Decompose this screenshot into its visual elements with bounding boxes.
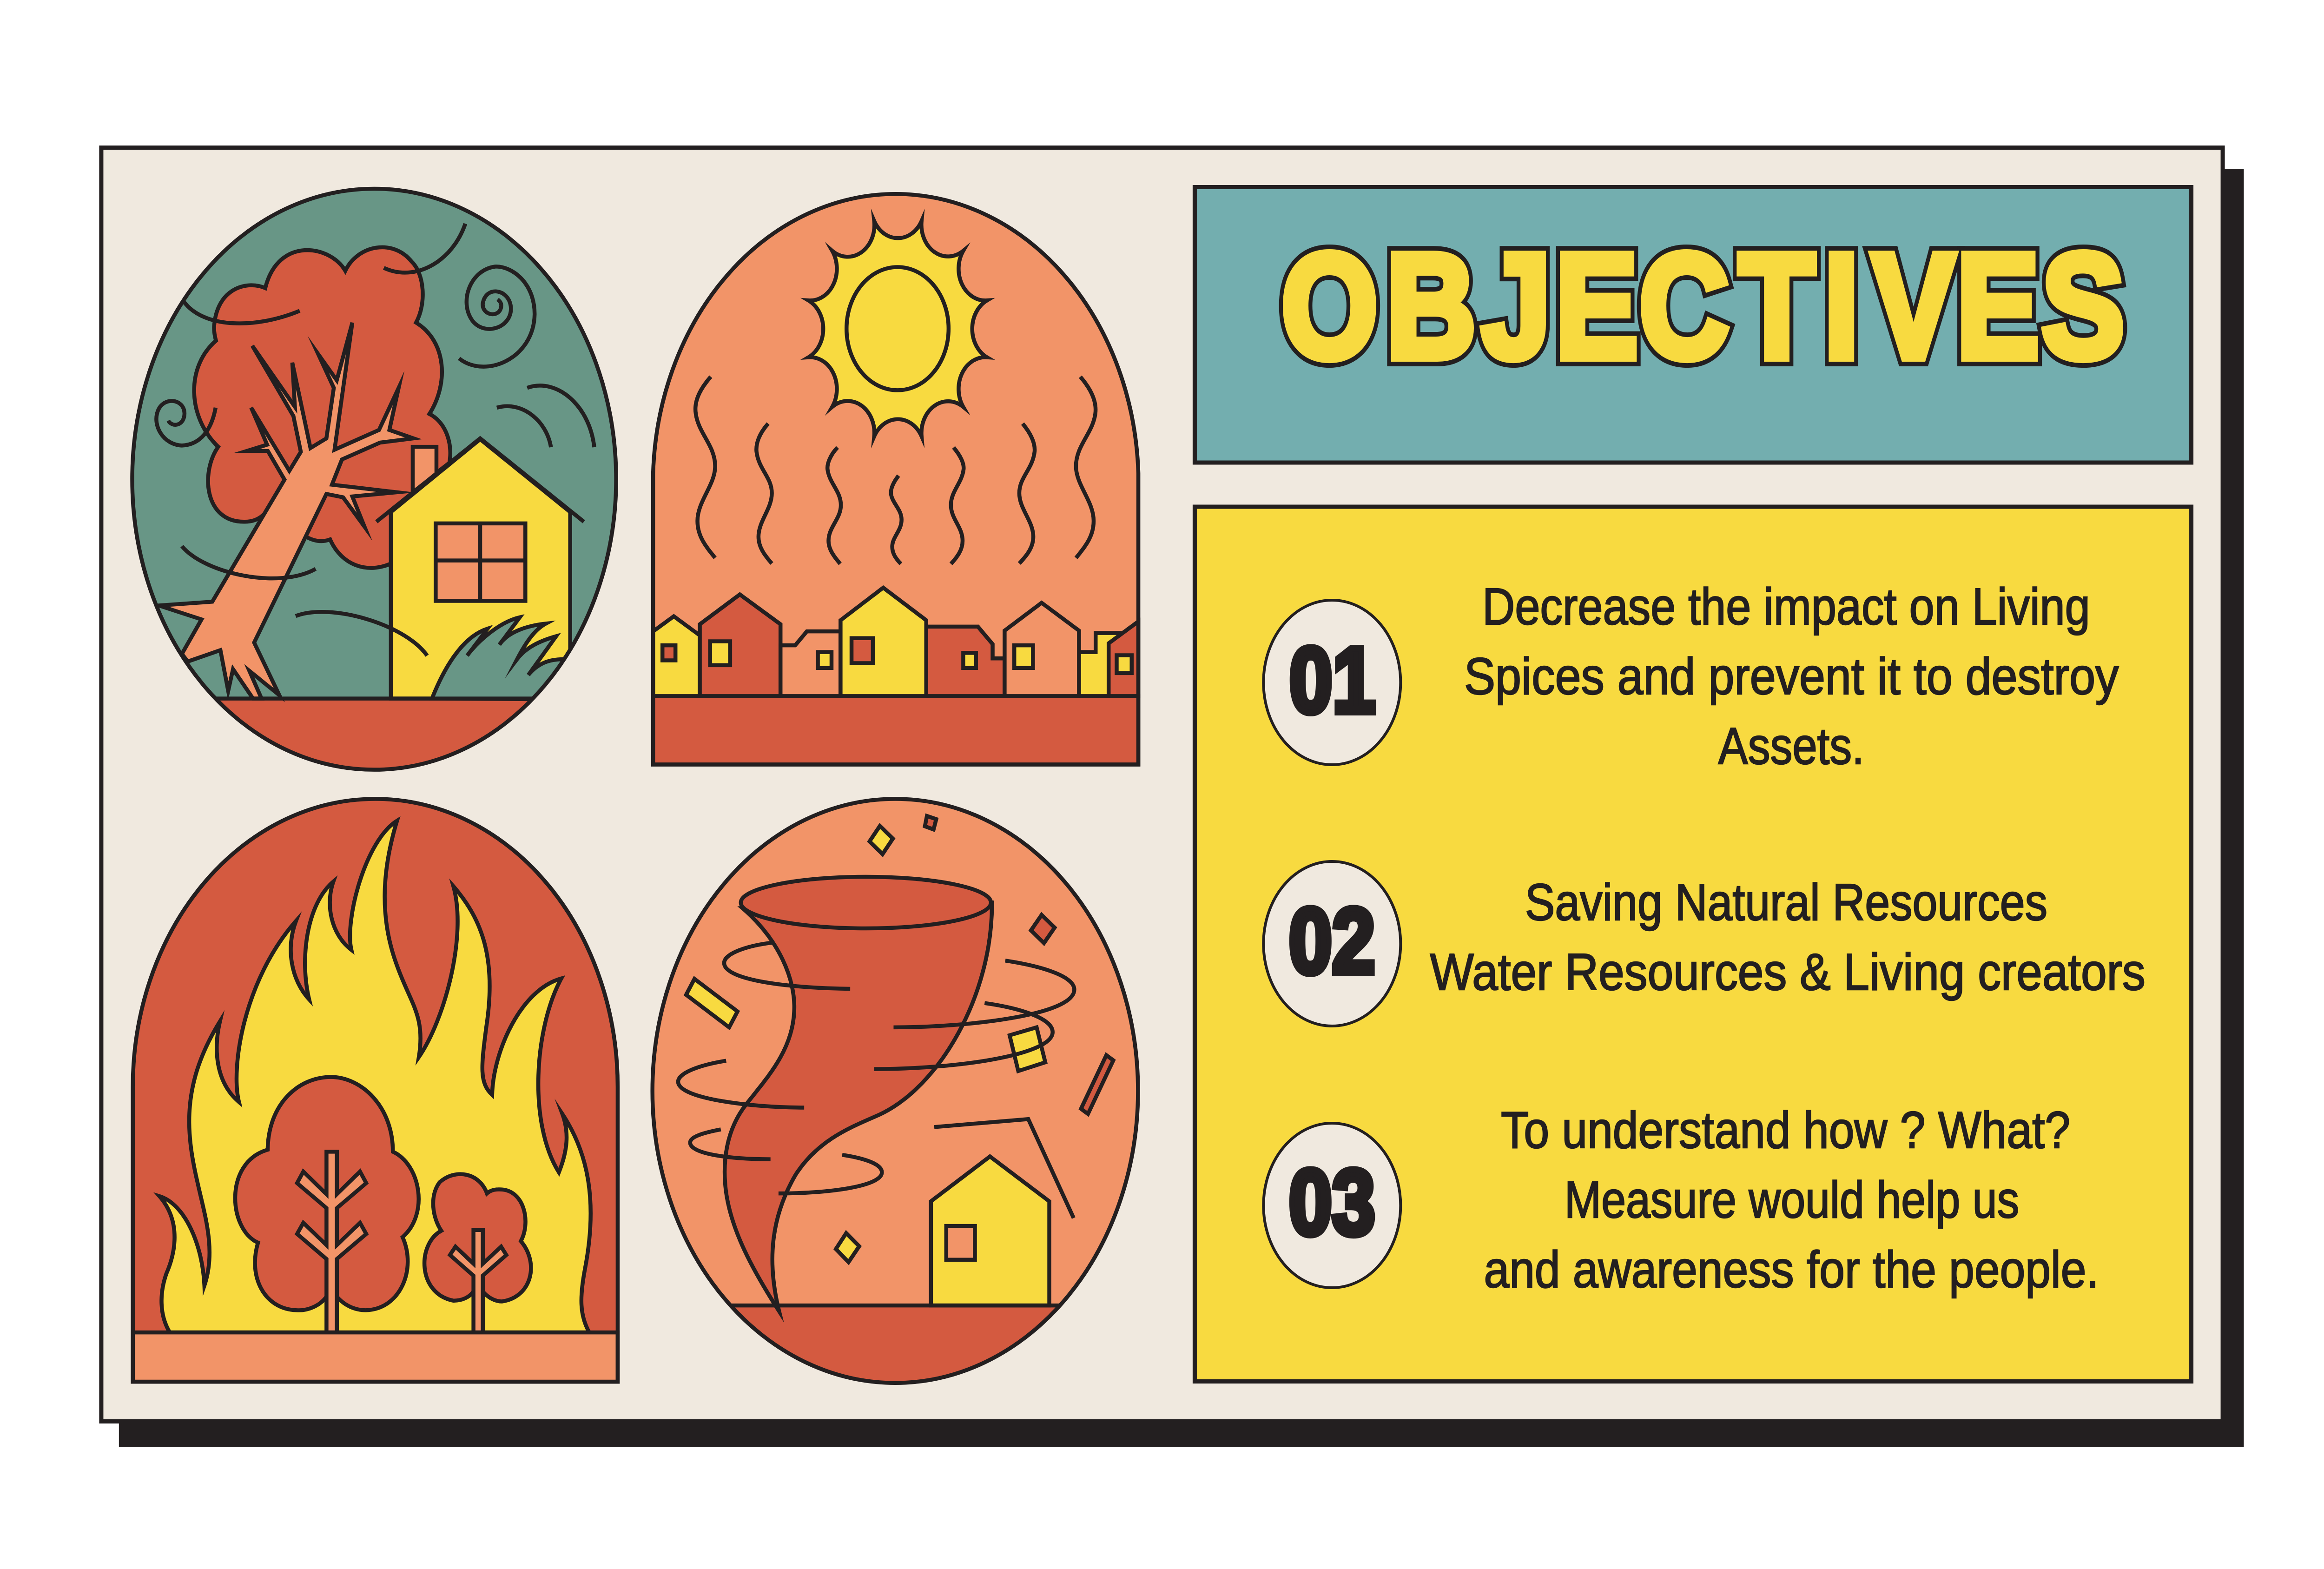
sun rays [808, 221, 987, 437]
objective 02 text: Saving Natural Resources [1525, 874, 2047, 931]
large tree trunk [297, 1152, 366, 1332]
ground [133, 1332, 618, 1382]
heatwave arch outline [653, 194, 1138, 764]
number badge 03: 03 [1289, 1151, 1375, 1254]
objective 02 text [1430, 874, 2146, 1001]
card drop shadow [119, 169, 2244, 1447]
tornado circle outline [653, 799, 1138, 1383]
number badge 01 [1263, 600, 1400, 765]
objective 02 text: Water Resources & Living creators [1430, 943, 2146, 1001]
panel: wildfire illustration [133, 799, 618, 1382]
small tree trunk [450, 1230, 506, 1332]
ground line [726, 1304, 1066, 1307]
roof line [376, 438, 584, 522]
panel: tornado illustration [649, 799, 1142, 1385]
tornado top [741, 877, 991, 928]
number badge 02 [1263, 861, 1400, 1026]
tornado body [725, 903, 992, 1311]
small tree crown [424, 1174, 531, 1302]
number badge 01: 01 [1289, 629, 1375, 732]
objective 03 [1263, 1101, 2099, 1298]
ground [649, 1305, 1142, 1385]
house [391, 439, 570, 699]
title: OBJECTIVES [1282, 224, 2124, 389]
ground [653, 696, 1138, 764]
objective 03 text [1484, 1101, 2099, 1298]
objective 01 text: Spices and prevent it to destroy [1464, 648, 2119, 705]
ground line [204, 696, 545, 701]
swirl lines [678, 943, 1074, 1193]
house window [436, 523, 525, 601]
panel: title banner [1195, 187, 2192, 463]
sun disc [846, 267, 949, 390]
objective 03 text: Measure would help us [1565, 1171, 2019, 1229]
house [931, 1157, 1050, 1305]
ground [220, 700, 528, 768]
panel: heatwave illustration [653, 194, 1138, 764]
heat waves [695, 377, 1096, 564]
tree crown [194, 247, 450, 568]
objective 03 text: and awareness for the people. [1484, 1241, 2099, 1298]
main card panel [101, 148, 2223, 1422]
grass [432, 617, 571, 699]
objective 02 [1263, 861, 2146, 1026]
panel: windstorm illustration [130, 189, 619, 775]
number badge 02: 02 [1289, 889, 1375, 993]
wildfire arch outline [133, 799, 618, 1382]
objective 03 text: To understand how ? What? [1501, 1101, 2070, 1159]
objective 01 text: Decrease the impact on Living [1482, 578, 2090, 636]
house window [946, 1226, 975, 1260]
objective 01 [1263, 578, 2119, 775]
objective 01 text: Assets. [1718, 717, 1864, 775]
chimney [413, 447, 436, 492]
title: OBJECTIVES [1282, 224, 2124, 389]
fallen tree trunk [159, 323, 414, 699]
panel: objectives list [1195, 507, 2192, 1382]
large tree crown [235, 1077, 419, 1310]
broken roof [934, 1119, 1074, 1218]
flying debris [686, 816, 1113, 1262]
number badge 03 [1263, 1123, 1400, 1288]
objective 01 text [1464, 578, 2119, 775]
row of houses [653, 588, 1138, 696]
wind lines [156, 224, 594, 655]
windstorm circle outline [132, 189, 616, 770]
flames [159, 821, 591, 1332]
